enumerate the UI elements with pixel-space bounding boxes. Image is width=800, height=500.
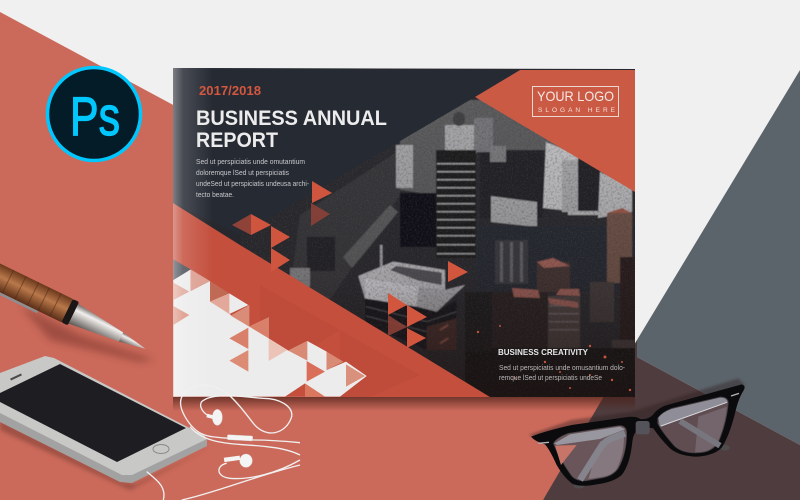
intro text	[196, 157, 309, 199]
earbud top	[212, 409, 222, 425]
accent triangles	[232, 181, 468, 348]
left lens tint	[588, 435, 624, 479]
earbud stem top	[206, 414, 215, 419]
red diagonal band	[173, 203, 490, 397]
intro text: tecto beatae.	[196, 190, 234, 199]
home button	[153, 444, 169, 454]
left tower lower right	[495, 240, 528, 284]
right lens	[658, 397, 728, 453]
frame	[531, 384, 745, 486]
front blocks	[492, 292, 548, 312]
left lens salmon reflection	[555, 445, 577, 465]
photo shade	[287, 143, 635, 397]
dark blue mid district	[529, 226, 538, 228]
foreground dark base	[465, 348, 635, 397]
cover base	[173, 68, 635, 397]
intro text: Sed ut perspiciatis unde omutantium	[196, 157, 305, 166]
red speckles	[477, 325, 631, 391]
smartphone	[0, 356, 212, 490]
right lens tint	[695, 407, 727, 452]
left lens	[553, 426, 627, 481]
tall brown tower	[607, 213, 632, 283]
intro text: undeSed ut perspiciatis undeusa archi-	[196, 179, 309, 188]
icon: Photoshop badge	[48, 68, 140, 160]
pen	[0, 260, 155, 363]
main title: BUSINESS ANNUAL	[196, 107, 387, 130]
main title	[196, 107, 387, 152]
icon: Photoshop badge: Ps	[70, 85, 120, 147]
band tonal shapes	[260, 285, 420, 397]
upper gray district	[400, 100, 560, 194]
right lens highlight	[661, 402, 727, 426]
photo grain	[240, 95, 635, 397]
left temple arm	[580, 433, 625, 480]
low white block	[491, 196, 537, 227]
earbud stem bottom	[224, 456, 240, 462]
glasses shadow	[528, 378, 745, 442]
business creativity caption: remque lSed ut perspiciatis undeSe	[499, 373, 602, 382]
brochure cover	[173, 68, 635, 397]
brown central block	[537, 262, 570, 292]
logo box	[532, 86, 618, 116]
business creativity caption: Sed ut perspiciatis unde omusantium dolo-	[499, 363, 625, 372]
business creativity caption	[498, 347, 625, 382]
rooftop white building	[358, 260, 465, 300]
inline remote	[227, 435, 253, 441]
background: salmon surface	[0, 12, 637, 500]
right temple arm	[680, 421, 720, 446]
lower dark tower	[358, 262, 465, 350]
logo box: SLOGAN HERE	[538, 107, 616, 114]
dark navy top-left panel	[195, 68, 476, 234]
dark mid block	[400, 193, 437, 247]
distant buildings	[474, 118, 493, 152]
background: gray panel	[637, 70, 800, 445]
red top-right panel	[475, 70, 635, 192]
phone screen	[0, 364, 186, 462]
intro text: doloremque lSed ut perspiciatis	[196, 168, 289, 177]
striped tower	[436, 150, 476, 258]
hinge left	[538, 440, 549, 445]
white triangle mosaic	[173, 259, 367, 397]
background: brown panel	[543, 340, 800, 500]
tall white blocks	[543, 142, 578, 212]
date heading: 2017/2018	[199, 83, 261, 98]
photo dark grain	[290, 100, 634, 340]
hinge right	[731, 393, 739, 396]
earbud bottom	[240, 454, 252, 467]
temple tips	[574, 445, 730, 489]
nose bridge	[636, 421, 650, 434]
glasses	[528, 378, 745, 489]
business creativity caption: BUSINESS CREATIVITY	[498, 347, 588, 357]
main title: REPORT	[196, 129, 278, 152]
left road district	[290, 150, 400, 300]
speaker	[10, 374, 22, 380]
logo box: YOUR LOGO	[537, 88, 614, 104]
city photo	[289, 99, 635, 396]
earphones	[147, 385, 300, 500]
left small building	[396, 145, 413, 188]
left lens band	[554, 427, 625, 445]
tower top	[445, 125, 474, 151]
cover shadow	[173, 397, 635, 411]
spine highlight	[173, 68, 206, 397]
right lens band	[658, 398, 728, 427]
